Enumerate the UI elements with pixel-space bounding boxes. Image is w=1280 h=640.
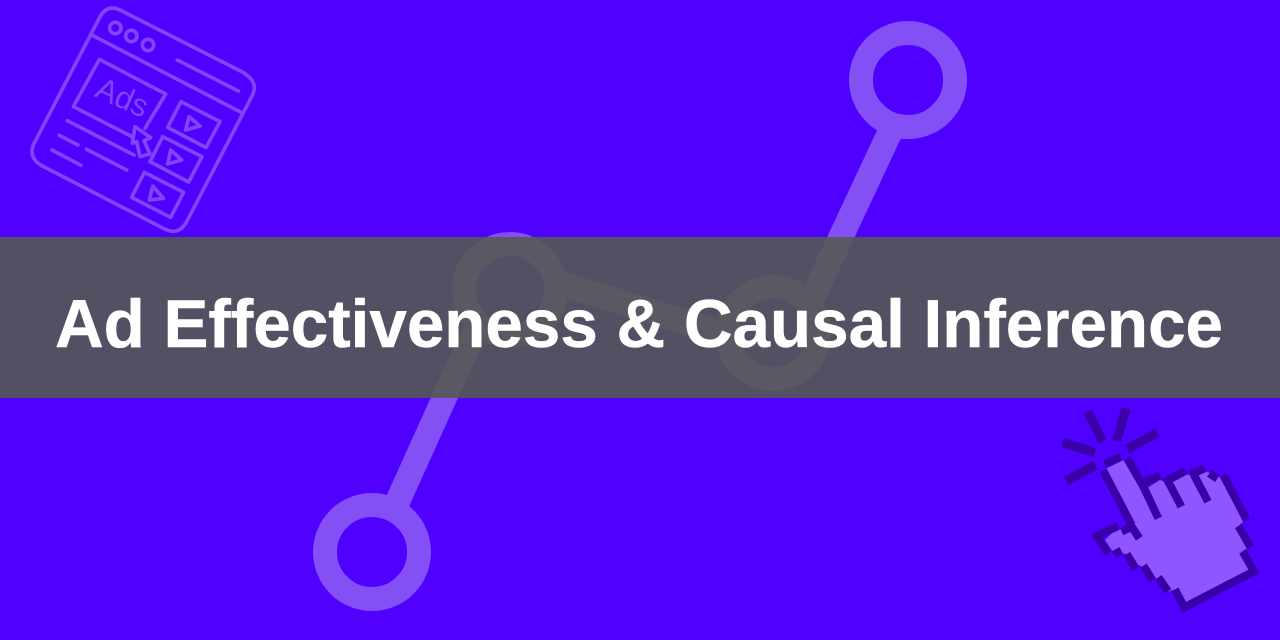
text: Ads label: Ads [90, 70, 154, 124]
title: Ad Effectiveness & Causal Inference [55, 286, 1223, 362]
click rays [1063, 408, 1157, 481]
title band [0, 237, 1280, 398]
icon: causal network graph [325, 33, 955, 599]
icon: ads browser window [32, 8, 254, 231]
icon: pixel hand cursor [1063, 408, 1254, 607]
